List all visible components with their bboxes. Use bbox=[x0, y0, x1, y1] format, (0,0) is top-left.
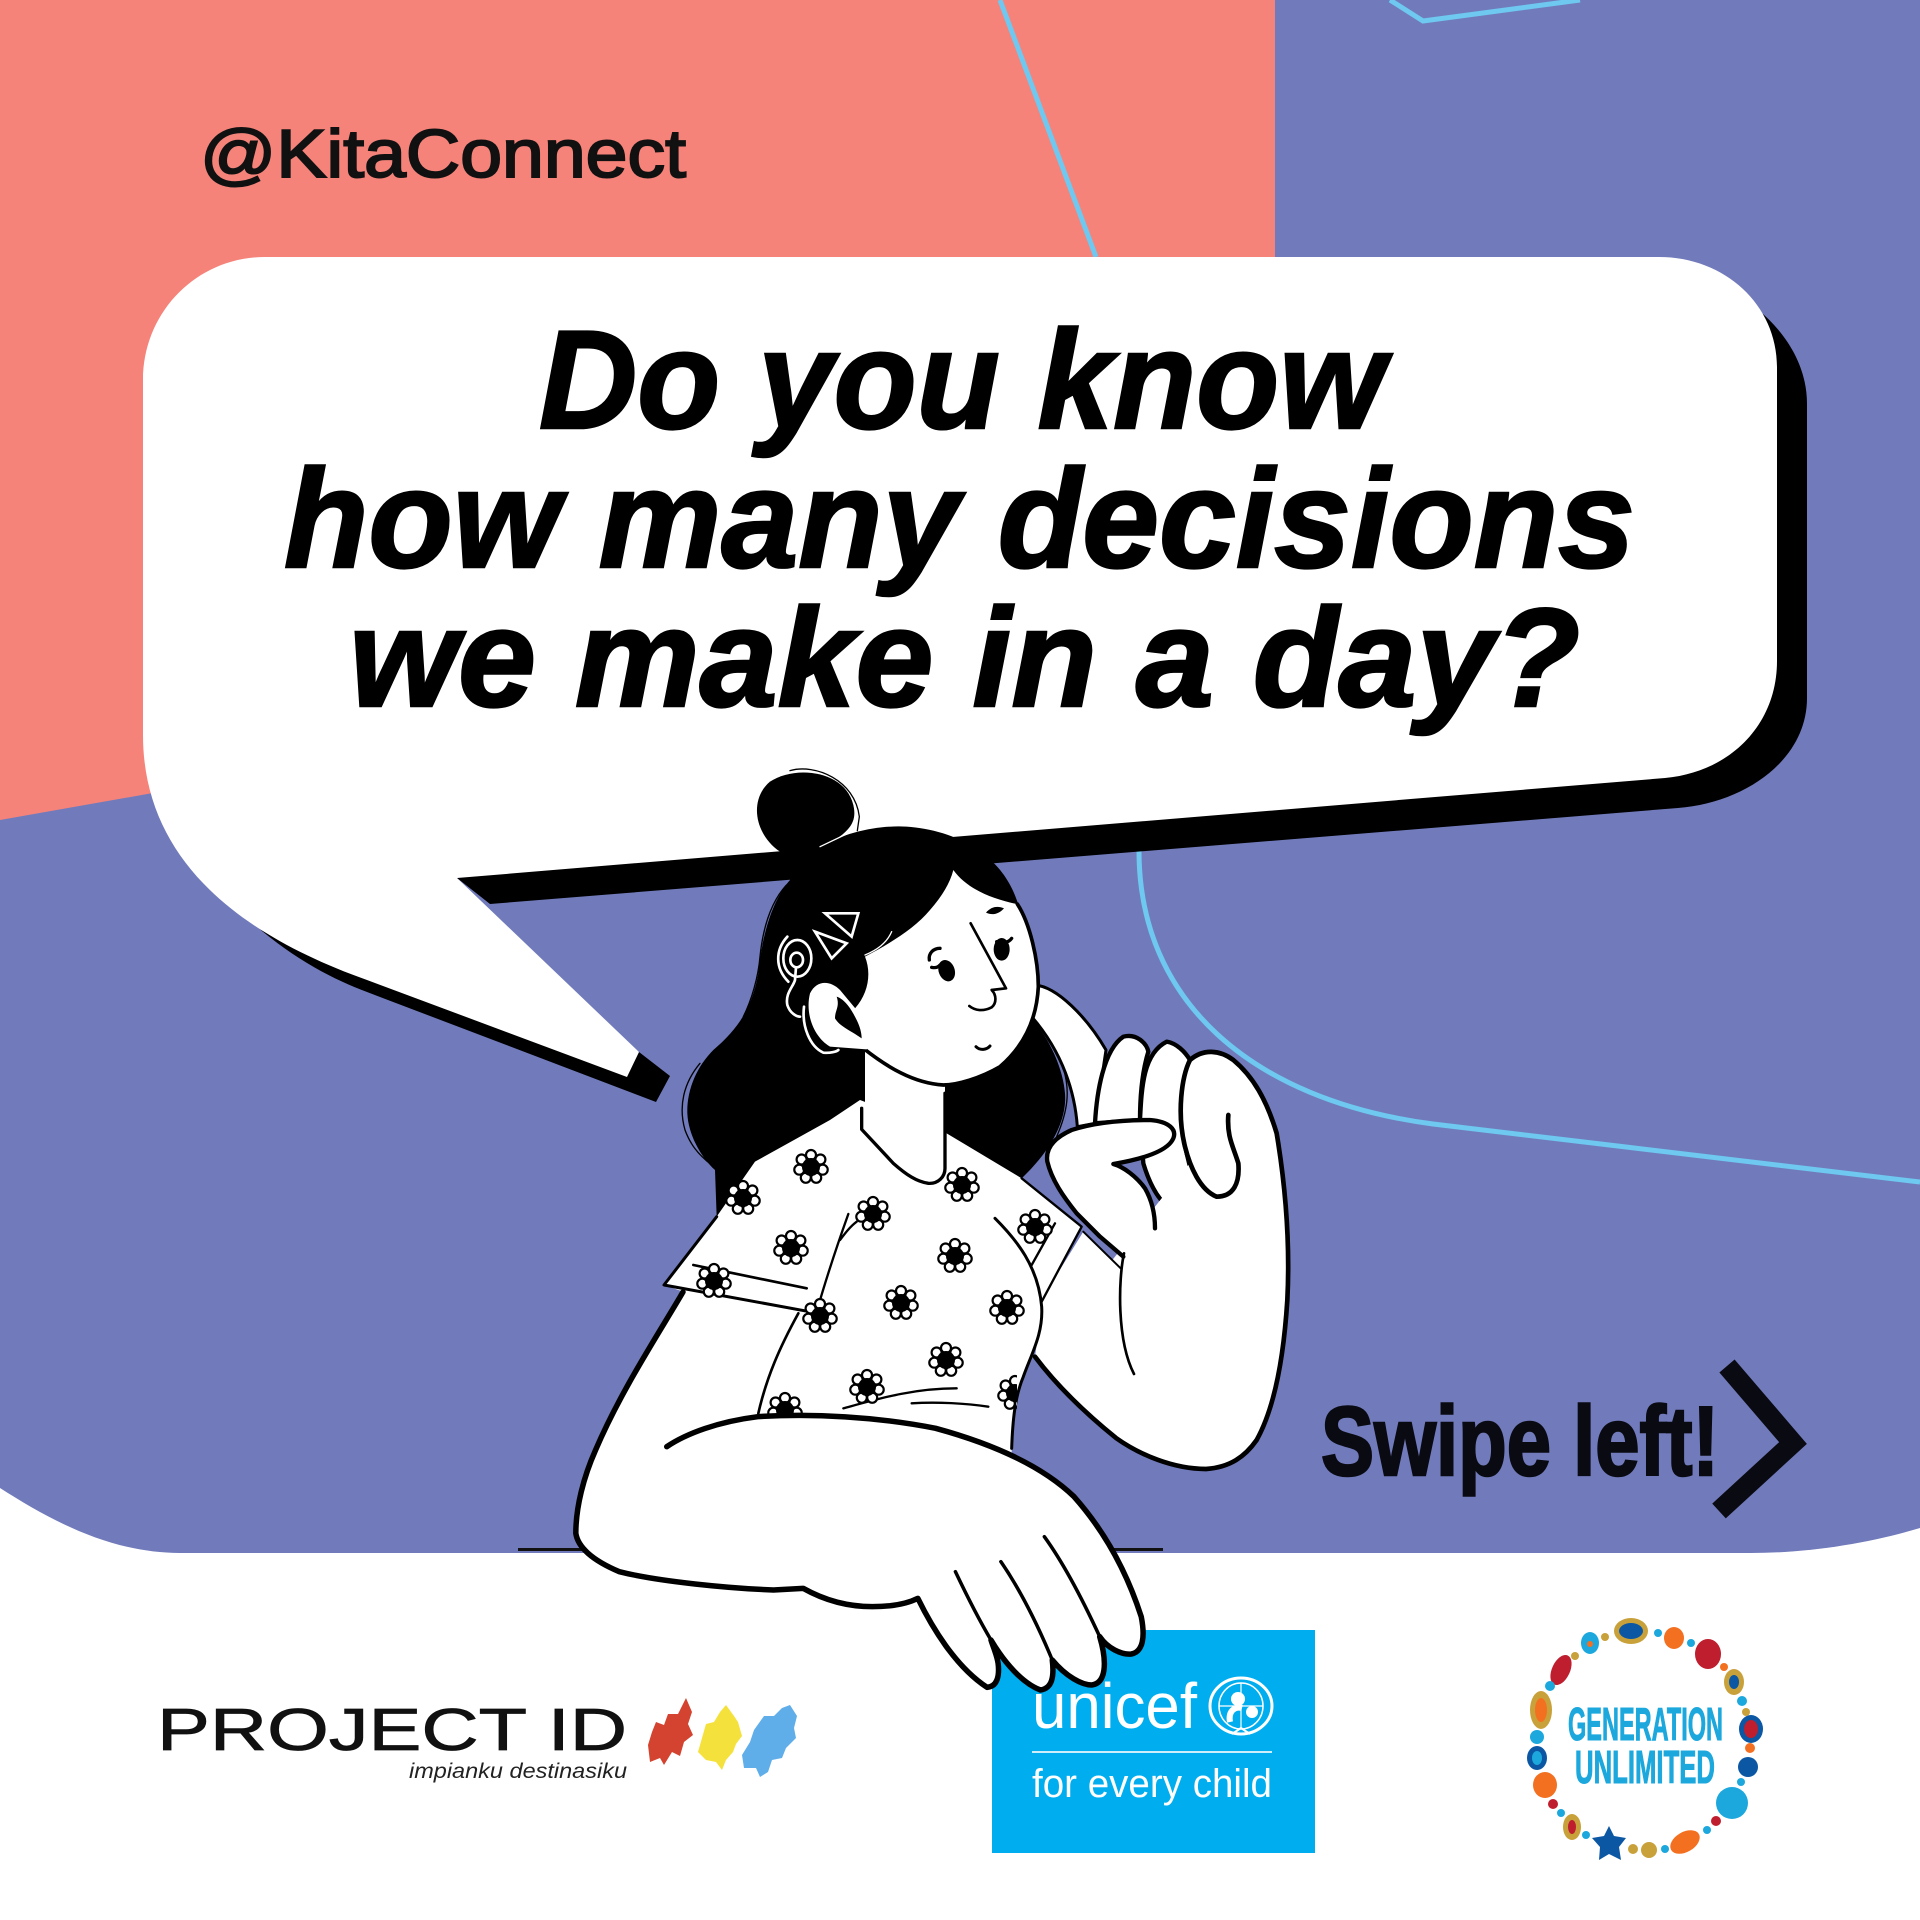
brows and lashes bbox=[929, 938, 1012, 968]
raised hand group bbox=[1032, 985, 1288, 1469]
swipe text: Swipe left! bbox=[1321, 1386, 1719, 1496]
call to action: Swipe left bbox=[1321, 1366, 1793, 1511]
handle: @KitaConnect: @KitaConnect bbox=[200, 116, 686, 192]
arrow chevron bbox=[1719, 1366, 1793, 1511]
blouse fill bbox=[640, 1100, 1082, 1453]
hair mass bbox=[687, 826, 1065, 1217]
nose and mouth bbox=[969, 923, 1006, 1010]
headline bbox=[284, 301, 1635, 736]
blouse wrinkles bbox=[843, 1388, 988, 1408]
logo: Generation Unlimited bbox=[1527, 1618, 1763, 1860]
wordmark: PROJECT ID bbox=[157, 1697, 627, 1763]
tagline: for every child bbox=[1032, 1762, 1272, 1806]
wordmark: UNLIMITED bbox=[1575, 1741, 1715, 1793]
background: salmon panel bbox=[0, 0, 1275, 820]
bun highlight bbox=[820, 830, 855, 847]
arm outline bbox=[576, 1292, 1143, 1690]
bubble body bbox=[143, 257, 1777, 1077]
bun outline bbox=[790, 769, 859, 831]
blouse flowers bbox=[697, 1150, 1052, 1426]
illustration: girl thinking bbox=[518, 769, 1288, 1690]
tagline: impianku destinasiku bbox=[409, 1760, 627, 1783]
sleeve hem line bbox=[693, 1265, 807, 1288]
ring finger bbox=[1140, 1042, 1194, 1206]
headline: we make in a day? bbox=[349, 579, 1580, 736]
ear outline bbox=[804, 1007, 838, 1053]
decorative cyan lines bbox=[1000, 0, 1920, 1182]
bead ring bbox=[1527, 1618, 1763, 1860]
wordmark: GENERATION bbox=[1568, 1698, 1723, 1750]
neck and collar fill bbox=[862, 1050, 945, 1183]
fringe highlights bbox=[865, 900, 943, 955]
wrist line bbox=[1083, 1232, 1121, 1268]
middle finger bbox=[1095, 1036, 1148, 1123]
hair group bbox=[682, 769, 1067, 1217]
blue tile bbox=[992, 1630, 1315, 1853]
headline: how many decisions bbox=[284, 440, 1635, 597]
divider bbox=[1032, 1751, 1272, 1753]
hair bun bbox=[757, 772, 854, 852]
right sleeve edge bbox=[1022, 1178, 1082, 1302]
hair clips bbox=[815, 913, 858, 958]
thumb and palm bbox=[1047, 1120, 1174, 1257]
resting arm and hand bbox=[576, 1292, 1143, 1690]
unicef word: unicef bbox=[1032, 1670, 1197, 1742]
face bbox=[835, 870, 1038, 1085]
wrist fill bbox=[1035, 1213, 1167, 1413]
eyes bbox=[935, 938, 1010, 984]
inner ear bbox=[835, 997, 862, 1038]
finger lines bbox=[955, 1537, 1100, 1660]
speech bubble bbox=[143, 257, 1807, 1102]
hearing aid bbox=[778, 937, 811, 1017]
table edge bbox=[518, 1548, 1163, 1551]
wordmark bbox=[1568, 1698, 1723, 1793]
jaw outline bbox=[863, 904, 1038, 1085]
collar outline bbox=[862, 1093, 945, 1183]
forehead brow bbox=[986, 907, 1004, 914]
unicef emblem bbox=[1210, 1678, 1272, 1734]
bodice edge bbox=[995, 1218, 1042, 1448]
logo: UNICEF bbox=[992, 1630, 1315, 1853]
underarm line bbox=[758, 1313, 798, 1413]
bubble shadow bbox=[255, 270, 1807, 1102]
arm fold bbox=[1120, 1253, 1134, 1374]
index finger behind head bbox=[1032, 985, 1106, 1127]
hair strand outlines bbox=[682, 882, 1067, 1165]
ear bbox=[809, 983, 880, 1049]
headline: Do you know bbox=[539, 301, 1393, 458]
left sleeve edge bbox=[664, 1217, 815, 1313]
bodice seam bbox=[817, 1214, 857, 1312]
blouse group bbox=[640, 1100, 1082, 1453]
lower lip bbox=[976, 1046, 990, 1049]
head group bbox=[778, 870, 1038, 1183]
forearm and pinky bbox=[1035, 1052, 1288, 1469]
brush marks bbox=[648, 1698, 797, 1777]
logo: Project ID bbox=[157, 1697, 797, 1783]
